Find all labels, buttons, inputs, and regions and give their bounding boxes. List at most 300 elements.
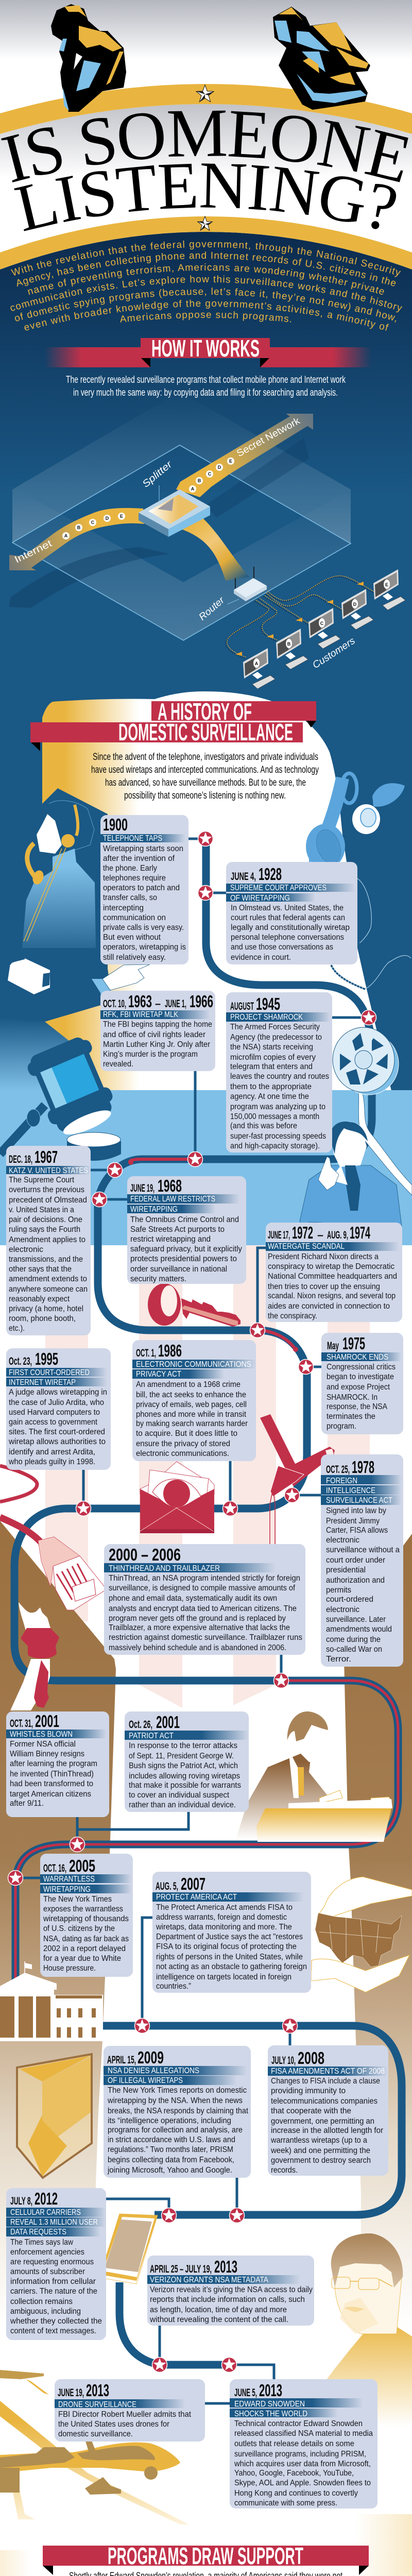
panel: 2007 protect america act: PROTECT AMERICA ACT xyxy=(156,1893,237,1902)
panel: 1928 supreme court: OF WIRETAPPING xyxy=(230,894,290,903)
panel: 1967 katz v. united states: electronic xyxy=(9,1245,43,1254)
panel: 1978 foreign intelligence surveillance act: court-ordered xyxy=(326,1595,373,1604)
panel: 2012 cellular carriers: amounts of subscriber xyxy=(10,2267,85,2276)
data packets A to E on internet band xyxy=(62,513,125,539)
panel: 2009 NSA denies allegations: in strict accordance with U.S. laws and xyxy=(108,2136,235,2144)
panel: 1978 foreign intelligence surveillance act: amendments would xyxy=(326,1625,392,1634)
panel: 1945 project shamrock: (and this was before xyxy=(230,1122,297,1130)
curved introduction text: Agency, has been collecting phone and Internet records of U.S. citizens in the xyxy=(16,251,396,286)
history introduction xyxy=(91,752,319,801)
timeline line xyxy=(14,839,402,2365)
panel: 1972-1974 watergate scandal xyxy=(266,1223,402,1322)
panel: 1978 foreign intelligence surveillance act: electronic xyxy=(326,1536,359,1545)
panel: 2012 cellular carriers: The Times says law xyxy=(10,2238,74,2247)
customer computers: D xyxy=(353,602,357,607)
customer computers xyxy=(243,569,405,689)
panel: 1928 supreme court: court rules that federal agents can xyxy=(231,913,345,922)
diagram platform xyxy=(9,392,351,640)
panel: 1945 project shamrock xyxy=(226,992,332,1153)
panel: 2001 whistles blown: Former NSA official xyxy=(10,1740,76,1749)
panel: 1972-1974 watergate scandal: JUNE 17, xyxy=(268,1229,290,1241)
panel: 1978 foreign intelligence surveillance act: President Jimmy xyxy=(326,1517,380,1526)
panel: 2009 NSA denies allegations: breaks, the NSA responds by claiming that xyxy=(108,2107,249,2115)
panel: 1972-1974 watergate scandal: then tries to cover up the ensuing xyxy=(268,1282,380,1291)
panel: 2000-2006 thinthread and trailblazer: surveillance, is designed to compile massive amounts of xyxy=(109,1584,296,1592)
header gold arc xyxy=(0,84,412,134)
panel: 1978 foreign intelligence surveillance act: OCT. 25, xyxy=(326,1464,350,1476)
panel: 2005 warrantless wiretapping: for a year due to White xyxy=(43,1954,121,1963)
panel: 1972-1974 watergate scandal: – xyxy=(317,1229,323,1241)
panel: 2008 FISA amendments act: providing immunity to xyxy=(271,2087,346,2095)
panel: 2005 warrantless wiretapping: The New York Times xyxy=(43,1895,112,1904)
panel: 2013 verizon grants NSA metadata: APRIL 25 – JULY 19, xyxy=(150,2263,212,2275)
panel: 2001 whistles blown: William Binney resigns xyxy=(10,1750,84,1758)
panel: 2005 warrantless wiretapping: NSA, dating as far back as xyxy=(43,1935,129,1943)
panel: 2005 warrantless wiretapping: wiretapping of thousands xyxy=(43,1914,129,1923)
panel: 1963-1966 RFK FBI wiretap MLK: 1966 xyxy=(190,992,213,1011)
panel: 2013 verizon grants NSA metadata xyxy=(147,2256,314,2326)
panel: 2001 whistles blown: OCT. 31, xyxy=(10,1718,33,1730)
panel: 2008 FISA amendments act: FISA AMENDMENTS ACT OF 2008 xyxy=(271,2067,385,2076)
panel: 1967 katz v. united states: ruling says the Fourth xyxy=(9,1225,80,1234)
panel: 1975 shamrock ends: SHAMROCK ENDS xyxy=(327,1353,388,1362)
panel: 2009 NSA denies allegations: regulations.” Two months later, PRISM xyxy=(108,2145,233,2154)
curved introduction text: Americans oppose such programs. xyxy=(120,311,291,323)
panel: 2012 cellular carriers: 2012 xyxy=(35,2189,58,2208)
panel: 1986 electronic communications privacy act: 1986 xyxy=(158,1341,182,1360)
panel: 1968 federal law restricts wiretapping: order surveillance in national xyxy=(130,1265,227,1274)
panel: 2013 edward snowden: SHOCKS THE WORLD xyxy=(234,2410,307,2418)
background: flag stripes xyxy=(45,1245,370,1708)
panel: 2008 FISA amendments act: telecommunications companies xyxy=(271,2097,377,2106)
panel: 1995 first court-ordered internet wiretap: Oct. 23, xyxy=(9,1355,32,1367)
illustration: red key xyxy=(148,1283,241,1327)
panel: 1995 first court-ordered internet wiretap: A judge allows wiretapping in xyxy=(9,1388,107,1397)
panel: 2008 FISA amendments act: increase in the allotted length for xyxy=(271,2126,383,2135)
data packets A to E on internet band: C xyxy=(91,520,95,525)
panel: 2007 protect america act: FISA to its original focus of protecting the xyxy=(156,1942,297,1951)
background: pale gold left xyxy=(0,2550,31,2576)
data packets A to E on internet band: D xyxy=(106,516,109,521)
panel: 2012 cellular carriers: enforcement agencies xyxy=(10,2248,84,2257)
panel: 2008 FISA amendments act: that cooperate with the xyxy=(271,2107,351,2115)
panel: 2000-2006 thinthread and trailblazer: THINTHREAD AND TRAILBLAZER xyxy=(109,1564,220,1573)
background: brown left mountain xyxy=(0,1521,116,2331)
panel: 1968 federal law restricts wiretapping: restrict wiretapping and xyxy=(130,1235,211,1244)
panel: 2013 edward snowden: communicate with some press. xyxy=(234,2499,337,2507)
panel: 1995 first court-ordered internet wiretap: FIRST COURT-ORDERED xyxy=(9,1368,90,1377)
panel: 2009 NSA denies allegations: programs for collection and analysis, are xyxy=(108,2126,243,2134)
background: light blue band xyxy=(0,1090,412,1245)
icon: second star xyxy=(198,216,212,230)
panel: 1975 shamrock ends: May xyxy=(327,1340,339,1352)
panel: 1963-1966 RFK FBI wiretap MLK: 1963 xyxy=(128,992,152,1011)
panel: 1945 project shamrock: 1945 xyxy=(256,994,280,1013)
timeline red overlays xyxy=(15,1159,398,1978)
panel: 1967 katz v. united states: reasonably expect xyxy=(9,1295,70,1303)
panel: 2007 protect america act: The Protect America Act amends FISA to xyxy=(156,1903,293,1912)
panel: 1945 project shamrock: and high-capacity storage). xyxy=(230,1142,320,1150)
panel: 2012 cellular carriers: collection remains xyxy=(10,2297,73,2306)
panel: 1975 shamrock ends: response, the NSA xyxy=(327,1402,388,1411)
panel: 2013 verizon grants NSA metadata: reports that include information on calls, such xyxy=(150,2295,305,2304)
panel: 2013 verizon grants NSA metadata: as length, location, time of day and more xyxy=(150,2306,287,2314)
panel: 2013 edward snowden: Yahoo, Google, Facebook, YouTube, xyxy=(234,2469,354,2478)
panel: 1967 katz v. united states: etc.). xyxy=(9,1324,25,1333)
panel: 1928 supreme court: personal telephone conversations xyxy=(231,933,344,942)
label: splitter xyxy=(141,459,175,501)
panel: 1986 electronic communications privacy act: ELECTRONIC COMMUNICATIONS xyxy=(136,1360,251,1369)
panel: 2012 cellular carriers: information from cellular xyxy=(10,2277,96,2286)
panel: 1995 first court-ordered internet wiretap: INTERNET WIRETAP xyxy=(9,1378,76,1387)
panel: 2001 patriot act: includes allowing roving wiretaps xyxy=(129,1772,240,1781)
panel: 1968 federal law restricts wiretapping: The Omnibus Crime Control and xyxy=(130,1215,239,1224)
curved introduction text: name of preventing terrorism, Americans are wondering whether private xyxy=(28,263,384,295)
curved introduction text xyxy=(10,240,403,331)
panel: 2013 edward snowden: which acquires user data from Microsoft, xyxy=(234,2460,371,2468)
panel: 1986 electronic communications privacy act: An amendment to a 1968 crime xyxy=(136,1380,241,1389)
panel: 2001 whistles blown: target American citizens xyxy=(10,1790,91,1799)
diagram: how surveillance splitter works xyxy=(9,392,405,689)
panel: 1975 shamrock ends: terminates the xyxy=(327,1412,375,1421)
panel: 2000-2006 thinthread and trailblazer xyxy=(104,1544,305,1655)
panel: 1963-1966 RFK FBI wiretap MLK: King’s murder is the program xyxy=(103,1050,198,1059)
panel: 2012 cellular carriers: REVEAL 1.3 MILLION USER xyxy=(10,2218,98,2227)
panel: 1972-1974 watergate scandal: 1972 xyxy=(292,1223,313,1242)
panel: 2001 whistles blown: after 9/11. xyxy=(10,1799,44,1808)
panel: 2000-2006 thinthread and trailblazer: phone and email data, systematically audit its own xyxy=(109,1594,277,1603)
panel: 1963-1966 RFK FBI wiretap MLK: JUNE 1, xyxy=(165,998,186,1010)
customer computers: A xyxy=(255,661,259,666)
panel: 1967 katz v. united states xyxy=(6,1146,91,1335)
panel: 2001 patriot act: Oct. 26, xyxy=(129,1719,152,1731)
panel: 1986 electronic communications privacy act xyxy=(132,1340,256,1461)
panel: 1986 electronic communications privacy act: by making search warrants harder xyxy=(136,1419,248,1428)
panel: 1972-1974 watergate scandal: conspiracy to wiretap the Democratic xyxy=(268,1262,394,1271)
figure: left eavesdropper on phone xyxy=(51,4,126,112)
panel: 1967 katz v. united states: Amendment applies to xyxy=(9,1235,85,1244)
splitter box xyxy=(139,489,210,537)
panel: 2008 FISA amendments act: warrantless wiretaps (up to a xyxy=(270,2136,367,2145)
panel: 1978 foreign intelligence surveillance act: presidential xyxy=(326,1566,366,1574)
panel: 2013 drone surveillance: JUNE 19, xyxy=(58,2387,84,2399)
panel: 1928 supreme court: 1928 xyxy=(259,865,282,884)
panel: 1967 katz v. united states: DEC. 18, xyxy=(9,1154,32,1165)
panel: 2013 edward snowden: JUNE 5, xyxy=(234,2387,257,2399)
panel: 1945 project shamrock: AUGUST xyxy=(230,1001,254,1012)
panel: 1928 supreme court: evidence in court. xyxy=(231,953,291,962)
panel: 2009 NSA denies allegations: begins collecting data from Facebook, xyxy=(108,2156,234,2164)
panel: 1963-1966 RFK FBI wiretap MLK: revealed. xyxy=(103,1060,133,1069)
title line 1: IS SOMEONE xyxy=(1,110,408,182)
panel: 2009 NSA denies allegations: wiretapping by the NSA. When the news xyxy=(107,2096,243,2105)
panel: 1945 project shamrock: microfilm copies of every xyxy=(230,1053,316,1062)
illustration: man with headset xyxy=(22,801,96,948)
timeline star markers xyxy=(8,832,376,2372)
panel: 1900 telephone taps: the phone. Early xyxy=(103,864,157,873)
illustration: Nixon xyxy=(300,1122,402,1247)
panel: 1968 federal law restricts wiretapping: Safe Streets Act purports to xyxy=(130,1225,225,1234)
panel: 1967 katz v. united states: precedent of Olmstead xyxy=(9,1196,87,1205)
panel: 1900 telephone taps: Wiretapping starts soon xyxy=(103,844,183,853)
curved introduction text: communication exists. Let’s explore how this surveillance works and the history xyxy=(10,275,403,312)
panel: 1995 first court-ordered internet wiretap: sites. The first court-ordered xyxy=(9,1428,105,1436)
panel: 1986 electronic communications privacy act: ensure the privacy of stored xyxy=(136,1439,230,1448)
panel: 2005 warrantless wiretapping: 2005 xyxy=(69,1856,95,1875)
illustration: red surveillance camera xyxy=(260,1414,335,1544)
panel: 1972-1974 watergate scandal: National Committee headquarters and xyxy=(268,1272,397,1281)
panel: 1968 federal law restricts wiretapping xyxy=(127,1176,246,1284)
panel: 1986 electronic communications privacy act: OCT. 1, xyxy=(136,1347,156,1359)
panel: 1900 telephone taps: 1900 xyxy=(103,815,128,834)
history introduction: Since the advent of the telephone, investigators and private individuals xyxy=(93,752,318,762)
panel: 2005 warrantless wiretapping: House pressure. xyxy=(43,1964,96,1973)
decorative right curl xyxy=(367,2571,412,2576)
panel: 1978 foreign intelligence surveillance act: FOREIGN xyxy=(326,1477,357,1485)
panel: 2012 cellular carriers xyxy=(6,2188,106,2340)
panel: 1986 electronic communications privacy act: privacy of emails, web pages, cell xyxy=(136,1400,247,1409)
background: title grey band xyxy=(0,104,412,180)
panel: 2009 NSA denies allegations xyxy=(104,2046,251,2178)
panel: 1963-1966 RFK FBI wiretap MLK: RFK, FBI WIRETAP MLK xyxy=(103,1010,179,1019)
panel: 2000-2006 thinthread and trailblazer: restriction against domestic surveillance. Trailblazer runs xyxy=(109,1633,302,1642)
panel: 1986 electronic communications privacy act: PRIVACY ACT xyxy=(136,1370,181,1379)
panel: 2012 cellular carriers: content of text messages. xyxy=(10,2327,96,2335)
label: customers: Customers xyxy=(311,635,357,671)
panel: 1963-1966 RFK FBI wiretap MLK: – xyxy=(155,998,161,1010)
panel: 1978 foreign intelligence surveillance act: so-called War on xyxy=(326,1645,382,1654)
panel: 2005 warrantless wiretapping xyxy=(40,1854,133,1977)
panel: 2013 drone surveillance: DRONE SURVEILLANCE xyxy=(58,2400,136,2409)
secret network arrow: Secret Network xyxy=(235,415,302,459)
panel: 1967 katz v. united states: pair of decisions. One xyxy=(9,1215,82,1224)
illustration: drones xyxy=(0,2370,189,2524)
panel: 1967 katz v. united states: 1967 xyxy=(35,1147,58,1166)
panel: 1900 telephone taps xyxy=(100,815,188,964)
title xyxy=(1,110,408,231)
panel: 1963-1966 RFK FBI wiretap MLK: OCT. 10, xyxy=(103,998,126,1010)
panel: 1986 electronic communications privacy act: phones and more while in transit xyxy=(136,1410,247,1419)
data packets A to E on secret network band: D xyxy=(218,465,221,470)
panel: 2007 protect america act: address warrants, foreign and domestic xyxy=(156,1913,287,1922)
panel: 1972-1974 watergate scandal: President Richard Nixon directs a xyxy=(268,1252,379,1261)
panel: 2013 verizon grants NSA metadata: without revealing the content of the call. xyxy=(149,2315,288,2324)
panel: 2008 FISA amendments act: JULY 10, xyxy=(271,2055,296,2066)
panel: 1995 first court-ordered internet wiretap: identify and arrest Ardita, xyxy=(9,1448,95,1456)
panel: 2012 cellular carriers: are requesting enormous xyxy=(10,2258,94,2266)
panel: 1978 foreign intelligence surveillance act: surveillance. Later xyxy=(326,1615,386,1624)
panel: 2008 FISA amendments act: records. xyxy=(271,2166,298,2175)
customer computers: C xyxy=(320,621,324,626)
panel: 2001 patriot act: Bush signs the Patriot Act, which xyxy=(129,1761,238,1770)
data packets A to E on secret network band: C xyxy=(208,471,212,477)
panel: 1967 katz v. united states: anywhere someone can xyxy=(9,1285,88,1294)
background: dark to light fade left of history xyxy=(0,1018,108,1091)
panel: 2001 patriot act: to cover an individual suspect xyxy=(129,1791,230,1800)
background: top grey fade xyxy=(0,0,412,59)
panel: 1900 telephone taps: operators, wiretapping is xyxy=(103,943,186,952)
panel: 2000-2006 thinthread and trailblazer: massively behind schedule and is abandoned in 2006. xyxy=(109,1643,286,1652)
panel: 1945 project shamrock: The Armed Forces Security xyxy=(230,1023,320,1031)
panel: 1978 foreign intelligence surveillance act: authorization and xyxy=(326,1576,385,1585)
panel: 1945 project shamrock: program was analyzing up to xyxy=(230,1103,325,1111)
curved introduction text: of domestic spying programs (because, let’s face it, they’re not new) and how, xyxy=(15,287,396,323)
panel: 2009 NSA denies allegations: APRIL 15, xyxy=(107,2054,136,2066)
panel: 1945 project shamrock: the NSA) starts receiving xyxy=(230,1043,313,1052)
data packets A to E on internet band: A xyxy=(64,533,68,538)
data packets A to E on secret network band: B xyxy=(198,478,201,483)
panel: 1967 katz v. united states: The Supreme Court xyxy=(9,1176,75,1184)
panel: 2012 cellular carriers: CELLULAR CARRIERS xyxy=(10,2208,81,2217)
panel: 1978 foreign intelligence surveillance act xyxy=(321,1454,403,1667)
illustration: hands holding US map xyxy=(312,1877,412,1992)
panel: 1900 telephone taps: But even without xyxy=(103,933,161,942)
panel: 1967 katz v. united states: overturns the previous xyxy=(9,1185,84,1194)
panel: 1967 katz v. united states: other says that the xyxy=(9,1265,72,1274)
data packets A to E on secret network band: E xyxy=(229,459,232,464)
panel: 2008 FISA amendments act: 2008 xyxy=(298,2048,324,2067)
panel: 2013 edward snowden: Skype, AOL and Apple. Snowden flees to xyxy=(234,2479,371,2487)
panel: 2013 edward snowden: Hong Kong and continues to covertly xyxy=(234,2489,358,2498)
panel: 1986 electronic communications privacy act: electronic communications. xyxy=(136,1449,229,1458)
panel: 1978 foreign intelligence surveillance act: Terror. xyxy=(326,1655,351,1664)
illustration: envelope with eye xyxy=(140,1462,214,1533)
panel: 1972-1974 watergate scandal: scandal. Nixon resigns, and several top xyxy=(268,1292,396,1300)
panel: 1963-1966 RFK FBI wiretap MLK xyxy=(100,991,215,1071)
panel: 1995 first court-ordered internet wiretap: who pleads guilty in 1998. xyxy=(8,1458,95,1466)
panel: 1967 katz v. united states: transmissions, and the xyxy=(9,1255,83,1264)
panel: 1975 shamrock ends: SHAMROCK. In xyxy=(327,1393,377,1402)
panel: 1975 shamrock ends: began to investigate xyxy=(327,1372,394,1381)
panel: 2005 warrantless wiretapping: of U.S. citizens by the xyxy=(43,1924,115,1933)
panel: 1963-1966 RFK FBI wiretap MLK: The FBI begins tapping the home xyxy=(103,1020,212,1029)
panel: 1945 project shamrock: leaves the country and routes xyxy=(230,1072,329,1081)
panel: 2007 protect america act: wiretaps, data monitoring and more. The xyxy=(156,1923,292,1931)
history introduction: possibility that someone’s listening is nothing new. xyxy=(124,790,286,801)
panel: 1900 telephone taps: telephones require xyxy=(103,874,166,883)
panel: 1900 telephone taps: communication on xyxy=(103,913,166,922)
panel: 2008 FISA amendments act: Changes to FISA include a clause xyxy=(271,2077,380,2086)
panel: 2000-2006 thinthread and trailblazer: analysts and encrypt data tied to American citizens. The xyxy=(109,1604,297,1613)
illustration: white house xyxy=(0,1961,103,2041)
panel: 1975 shamrock ends: and expose Project xyxy=(327,1383,390,1392)
panel: 2009 NSA denies allegations: The New York Times reports on domestic xyxy=(108,2086,247,2095)
panel: 2000-2006 thinthread and trailblazer: program never gets off the ground and is replaced by xyxy=(109,1614,286,1623)
background: pale gold sides xyxy=(355,2514,412,2576)
panel: 2013 drone surveillance: domestic surveillance. xyxy=(58,2430,133,2438)
panel: 2007 protect america act: intelligence on targets located in foreign xyxy=(156,1973,291,1981)
panel: 1900 telephone taps: TELEPHONE TAPS xyxy=(103,834,162,843)
panel: 1928 supreme court: SUPREME COURT APPROVES xyxy=(230,884,327,892)
panel: 1972-1974 watergate scandal: 1974 xyxy=(350,1223,370,1242)
panel: 2012 cellular carriers: JULY 8, xyxy=(10,2195,32,2207)
panel: 1963-1966 RFK FBI wiretap MLK: and office of civil rights leader xyxy=(103,1030,205,1039)
title line 2: LISTENING? xyxy=(14,163,397,231)
panel: 2000-2006 thinthread and trailblazer: 2000 – 2006 xyxy=(109,1545,181,1564)
panel: 2013 edward snowden: Technical contractor Edward Snowden xyxy=(234,2419,363,2428)
panel: 1945 project shamrock: telegram that enters and xyxy=(230,1062,313,1071)
panel: 1978 foreign intelligence surveillance act: Signed into law by xyxy=(326,1506,386,1515)
panel: 1967 katz v. united states: KATZ V. UNITED STATES xyxy=(9,1166,88,1175)
panel: 2007 protect america act: AUG. 5, xyxy=(156,1880,178,1892)
panel: 2009 NSA denies allegations: joining Microsoft, Yahoo and Google. xyxy=(107,2166,232,2175)
panel: 2005 warrantless wiretapping: OCT. 16, xyxy=(43,1862,66,1874)
banner: how it works xyxy=(45,335,372,367)
panel: 1995 first court-ordered internet wiretap: gain access to government xyxy=(9,1418,98,1427)
panel: 2005 warrantless wiretapping: 2002 in a report delayed xyxy=(43,1944,126,1953)
label: router xyxy=(197,595,239,623)
illustration: pointing man xyxy=(0,948,150,1022)
panel: 2013 edward snowden: surveillance programs, including PRISM, xyxy=(234,2450,366,2459)
panel: 1995 first court-ordered internet wiretap xyxy=(6,1348,111,1470)
panel: 2013 edward snowden: EDWARD SNOWDEN xyxy=(234,2400,305,2409)
panel: 2001 patriot act: of Sept. 11, President George W. xyxy=(129,1752,234,1760)
panel: 1978 foreign intelligence surveillance act: SURVEILLANCE ACT xyxy=(326,1496,392,1505)
illustration: gavel xyxy=(0,1033,121,1161)
panel: 2001 whistles blown: had been transformed to xyxy=(10,1780,93,1788)
data packets A to E on secret network band xyxy=(189,457,234,493)
internet arrow xyxy=(9,508,144,570)
illustration: Edward Snowden xyxy=(297,2233,412,2427)
panel: 1972-1974 watergate scandal: the conspiracy. xyxy=(268,1312,317,1320)
panel: 1945 project shamrock: PROJECT SHAMROCK xyxy=(230,1013,303,1022)
illustration: telephone handset xyxy=(306,773,411,989)
panel: 1900 telephone taps: still relatively easy. xyxy=(103,953,166,962)
panel: 1900 telephone taps: operators to patch and xyxy=(103,884,180,892)
panel: 2013 verizon grants NSA metadata: VERIZON GRANTS NSA METADATA xyxy=(150,2276,269,2284)
panel: 1900 telephone taps: after the invention of xyxy=(103,854,175,863)
panel: 1945 project shamrock: Agency (the predecessor to xyxy=(230,1033,322,1042)
panel: 1967 katz v. united states: room, phone booth, xyxy=(9,1314,76,1323)
panel: 2007 protect america act: Department of Justice says the act "restores xyxy=(156,1933,303,1941)
panel: 1975 shamrock ends: program. xyxy=(327,1422,356,1431)
panel: 2013 edward snowden: 2013 xyxy=(259,2381,282,2400)
panel: 1995 first court-ordered internet wiretap: 1995 xyxy=(35,1349,58,1368)
customer computers: E xyxy=(385,582,388,587)
panel: 1900 telephone taps: transfer calls, so xyxy=(103,893,157,902)
panel: 2012 cellular carriers: DATA REQUESTS xyxy=(10,2228,66,2236)
panel: 1928 supreme court xyxy=(226,862,357,964)
banner: a history of domestic surveillance: A HISTORY OF xyxy=(158,698,252,725)
illustration: film reel xyxy=(333,1027,412,1195)
panel: 1978 foreign intelligence surveillance act: court order under xyxy=(326,1556,385,1565)
curved introduction text: even with broader knowledge of the government’s activities, a minority of xyxy=(24,300,389,331)
router xyxy=(234,567,267,601)
panel: 1928 supreme court: and use those conversations as xyxy=(231,943,333,952)
panel: 1995 first court-ordered internet wiretap: the case of Julio Ardita, who xyxy=(9,1398,104,1407)
panel: 2007 protect america act xyxy=(152,1872,311,1993)
icon: header star xyxy=(196,85,214,102)
panel: 2001 patriot act: PATRIOT ACT xyxy=(129,1732,174,1740)
panel: 2005 warrantless wiretapping: WARRANTLESS xyxy=(43,1875,95,1884)
panel: 1978 foreign intelligence surveillance act: electronic xyxy=(326,1605,359,1614)
panel: 1968 federal law restricts wiretapping: 1968 xyxy=(158,1176,182,1195)
panel: 1968 federal law restricts wiretapping: WIRETAPPING xyxy=(130,1205,178,1214)
label: splitter: Splitter xyxy=(141,459,175,490)
panel: 2005 warrantless wiretapping: exposes the warrantless xyxy=(43,1905,123,1913)
panel: 1963-1966 RFK FBI wiretap MLK: Martin Luther King Jr. Only after xyxy=(103,1040,210,1049)
illustration: president at desk signing xyxy=(236,1711,392,1842)
panel: 2013 drone surveillance: FBI Director Robert Mueller admits that xyxy=(58,2410,192,2419)
panel: 2008 FISA amendments act xyxy=(268,2045,388,2176)
illustration: smartphone xyxy=(100,2214,158,2284)
data packets A to E on secret network band: A xyxy=(191,486,195,492)
panel: 1945 project shamrock: 150,000 messages a month xyxy=(230,1112,319,1121)
figure: right eavesdropper on phone xyxy=(273,7,370,110)
panel: 2012 cellular carriers: ambiguous, including xyxy=(10,2307,81,2316)
curved introduction text: With the revelation that the federal government, through the National Security xyxy=(11,240,401,277)
panel: 2001 whistles blown: WHISTLES BLOWN xyxy=(10,1730,73,1739)
